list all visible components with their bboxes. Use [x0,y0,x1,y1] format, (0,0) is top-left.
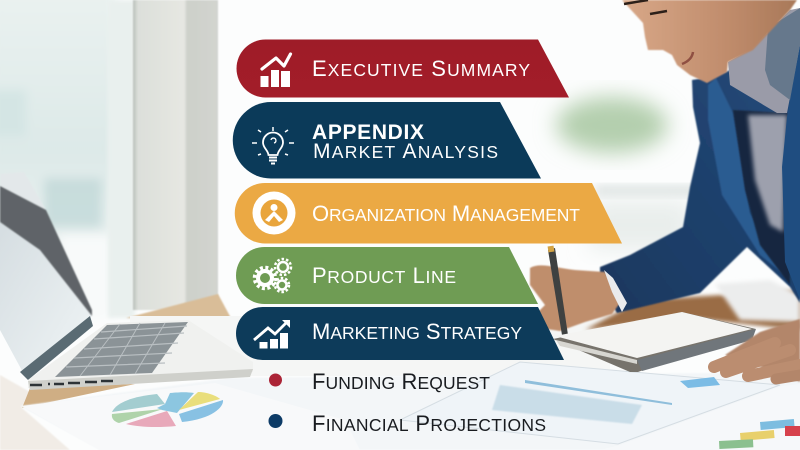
label: Marketing Strategy: MARKETING STRATEGY [312,319,522,344]
lapel [782,43,800,300]
pie chart [112,392,223,427]
banner: Appendix Market Analysis [233,102,541,178]
label: Appendix: APPENDIX [312,121,424,144]
icon: bar chart with trend line [260,54,290,87]
bullet: navy [268,414,282,428]
window on the left [0,0,115,320]
label: Funding Request: FUNDING REQUEST [312,369,490,394]
wooden table back [126,294,232,320]
label: Market Analysis: MARKET ANALYSIS [313,140,498,163]
wood under laptop [22,384,135,408]
dark wood right side [585,290,800,330]
jacket light panel [708,78,787,277]
banner: Executive Summary [237,40,569,98]
label: Product Line: PRODUCT LINE [312,263,456,288]
shirt [748,115,787,232]
face [622,0,797,83]
table cells [492,385,642,424]
lid lower hinge [20,316,93,380]
lid dark bezel [0,186,92,316]
collar [728,8,800,113]
front edge with ports [28,369,253,390]
lid top highlight [0,172,46,210]
blue highlight line [525,380,672,405]
colored chart document [600,384,800,450]
banner: Organization Management [235,183,622,244]
dotted collar [765,8,800,100]
banner: Marketing Strategy [236,307,564,360]
dark jacket interior [733,110,790,285]
hair and eyes [624,0,667,14]
laptop base [28,320,253,388]
icon: organization badge [252,192,296,234]
icon: gears [254,259,291,292]
blurred outdoor tree [556,97,668,153]
jacket [600,43,800,313]
spreadsheet document [400,362,780,444]
icon: growth chart [254,320,290,348]
document with pie chart [22,383,360,450]
pen [548,246,568,335]
blurred far background [590,200,690,250]
writing hand [530,265,622,331]
table foreground left [0,375,70,450]
laptop [0,172,253,390]
mouth [682,52,693,64]
lid screen [0,222,92,378]
right hand [714,319,800,382]
banner: Product Line [236,247,538,304]
keyboard [55,322,188,377]
window frame [108,0,135,318]
curtain [133,0,218,310]
pale table light right [715,280,800,322]
blue chart cell [680,377,720,388]
bullet: red [269,374,282,386]
label: Executive Summary: EXECUTIVE SUMMARY [312,56,530,81]
document pages bottom [20,372,800,450]
blurred balcony rail [595,185,705,197]
notebook [553,312,756,372]
shirt cuff [604,270,627,312]
ports [30,381,113,385]
table light top [130,316,610,376]
businessman [530,0,800,382]
list item: Financial Projections [268,411,546,436]
label: Financial Projections: FINANCIAL PROJECTIONS [312,411,546,436]
icon: light bulb [252,127,294,164]
label: Organization Management: ORGANIZATION MANAGEMENT [312,201,580,226]
list item: Funding Request [269,369,490,394]
